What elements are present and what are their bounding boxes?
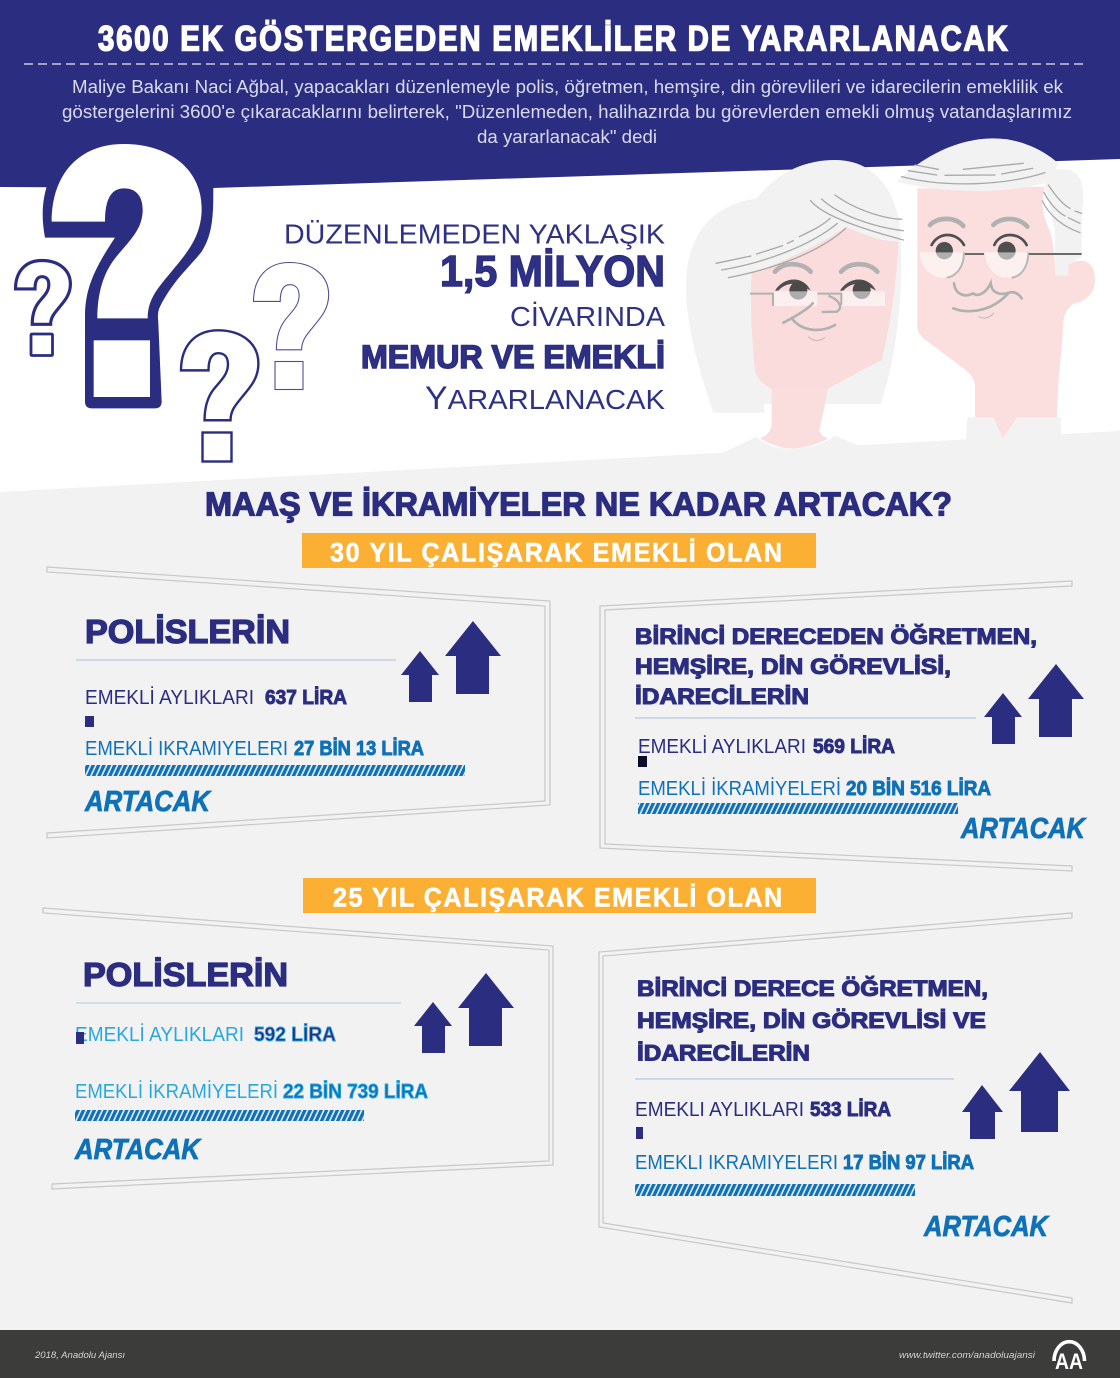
illustration: elderly couple: [686, 138, 1095, 455]
panel heading: HEMŞİRE, DİN GÖREVLİSİ VE: [637, 1008, 986, 1033]
bonus: 17 BİN 97 LİRA: [843, 1151, 974, 1174]
monthly pension: EMEKLI AYLIKLARI: [635, 1099, 804, 1121]
icon: up arrows: [414, 973, 514, 1053]
monthly pension: [638, 735, 895, 767]
headline: beneficiaries: CİVARINDA: [510, 301, 665, 332]
man: [897, 138, 1095, 439]
intro paragraph: göstergelerini 3600'e çıkaracaklarını belirterek, "Düzenlemeden, halihazırda bu görevlerden emekli olmuş vatandaşlarımız: [62, 101, 1072, 122]
bonus: EMEKLİ İKRAMİYELERİ: [75, 1080, 278, 1103]
bonus: [75, 1080, 428, 1121]
bonus: 22 BİN 739 LİRA: [283, 1080, 428, 1103]
icon: AA logo: AA: [1055, 1349, 1083, 1374]
panel: police, 25 years: [43, 908, 553, 1189]
footer: [0, 1330, 1120, 1378]
woman: [686, 160, 903, 455]
monthly pension: EMEKLİ AYLIKLARI: [638, 735, 806, 758]
section heading: MAAŞ VE İKRAMİYELER NE KADAR ARTACAK?: [205, 486, 952, 522]
panel: teachers, 30 years: [600, 581, 1087, 871]
bonus: [85, 737, 465, 776]
intro paragraph: [62, 76, 1072, 147]
band: 25 years: 25 YIL ÇALIŞARAK EMEKLİ OLAN: [333, 882, 782, 913]
icon: up arrows: [984, 664, 1084, 744]
headline: beneficiaries: DÜZENLEMEDEN YAKLAŞIK: [284, 218, 665, 250]
icon: thin question mark right: [254, 262, 329, 390]
headline: beneficiaries: 1,5 MİLYON: [440, 247, 665, 296]
artacak label: ARTACAK: [84, 786, 212, 818]
panel heading: [635, 624, 1037, 709]
header band: [0, 0, 1120, 188]
panel heading: HEMŞİRE, DİN GÖREVLİSİ,: [635, 654, 951, 679]
panel heading: [637, 976, 988, 1066]
monthly pension: 637 LİRA: [265, 686, 347, 709]
bonus: EMEKLİ IKRAMIYELERI: [85, 737, 288, 760]
panel heading: BİRİNCİ DERECE ÖĞRETMEN,: [637, 976, 988, 1001]
monthly pension: [85, 686, 347, 727]
monthly pension: [635, 1098, 891, 1139]
icon: up arrows: [401, 621, 501, 702]
bonus: 20 BİN 516 LİRA: [846, 777, 991, 800]
monthly pension: 592 LİRA: [254, 1023, 336, 1046]
monthly pension: 569 LİRA: [813, 735, 895, 758]
headline: beneficiaries: MEMUR VE EMEKLİ: [361, 339, 665, 375]
headline: beneficiaries: YARARLANACAK: [425, 380, 665, 416]
artacak label: ARTACAK: [74, 1134, 202, 1166]
icon: up arrows: [962, 1052, 1070, 1139]
panel heading: BİRİNCİ DERECEDEN ÖĞRETMEN,: [635, 624, 1037, 649]
title: 3600 EK GÖSTERGEDEN EMEKLİLER DE YARARLANACAK: [98, 19, 1008, 58]
panel heading: POLİSLERİN: [85, 613, 290, 650]
panel: police, 30 years: [47, 567, 550, 838]
monthly pension: 533 LİRA: [810, 1098, 891, 1121]
bonus: [635, 1151, 974, 1196]
headline: beneficiaries: [284, 218, 665, 416]
grey lower background: [0, 431, 1120, 1330]
panel heading: İDARECİLERİN: [637, 1040, 810, 1066]
bonus: EMEKLI IKRAMIYELERI: [635, 1152, 838, 1174]
panel heading: POLİSLERİN: [83, 956, 288, 993]
panel: teachers, 25 years: [599, 913, 1072, 1303]
intro paragraph: Maliye Bakanı Naci Ağbal, yapacakları düzenlemeyle polis, öğretmen, hemşire, din görevlileri ve idarecilerin emeklilik ek: [72, 76, 1064, 97]
bonus: [638, 777, 991, 814]
icon: small question mark left: [16, 260, 70, 356]
monthly pension: EMEKLİ AYLIKLARI: [85, 686, 254, 709]
icon: large question mark: [43, 144, 213, 408]
artacak label: ARTACAK: [923, 1211, 1050, 1243]
bonus: 27 BİN 13 LİRA: [294, 737, 424, 760]
panel heading: İDARECİLERİN: [635, 684, 809, 709]
monthly pension: [75, 1023, 336, 1046]
bonus: EMEKLİ İKRAMİYELERİ: [638, 777, 841, 800]
icon: middle question mark: [181, 330, 258, 462]
artacak label: ARTACAK: [960, 813, 1087, 845]
credit: 2018, Anadolu Ajansı: [34, 1350, 125, 1361]
social link: www.twitter.com/anadoluajansi: [899, 1350, 1036, 1361]
intro paragraph: da yararlanacak" dedi: [477, 126, 657, 147]
monthly pension: EMEKLİ AYLIKLARI: [75, 1023, 244, 1046]
band: 30 years: 30 YIL ÇALIŞARAK EMEKLİ OLAN: [330, 537, 782, 568]
